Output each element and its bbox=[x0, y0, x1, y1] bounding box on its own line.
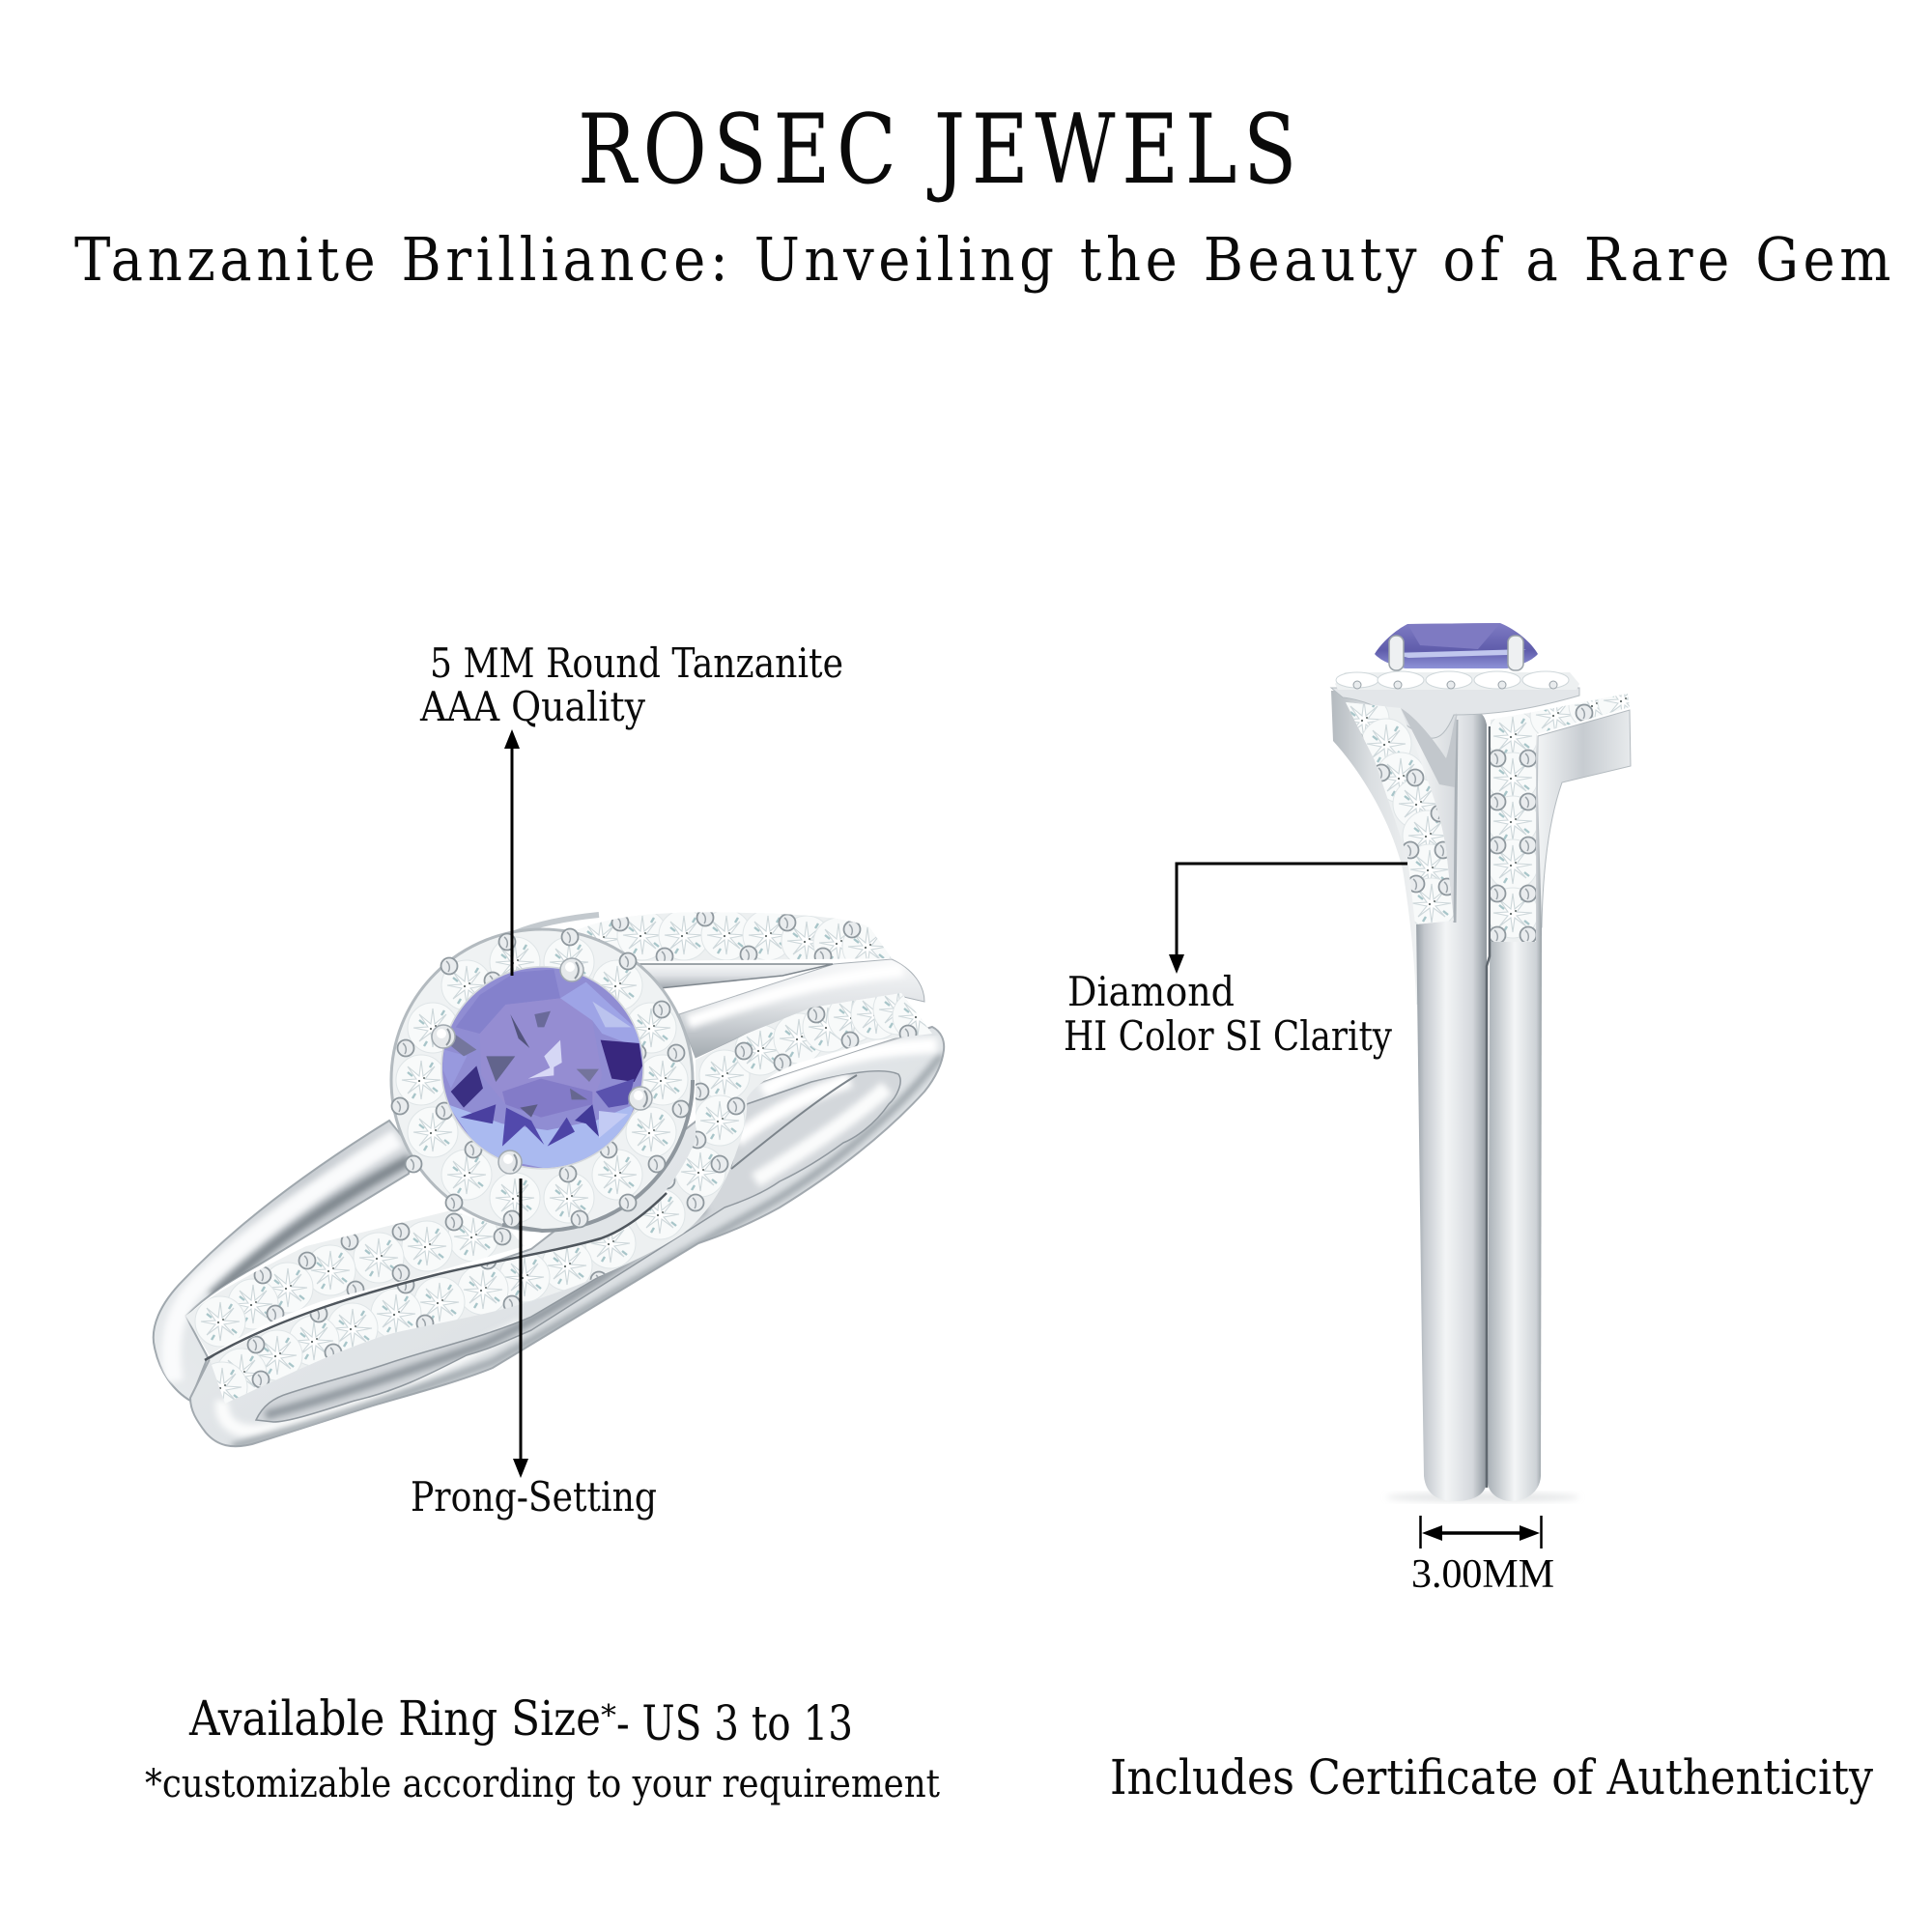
ring size note: - US 3 to 13 bbox=[616, 1695, 853, 1751]
arrow: to diamond label bbox=[1169, 864, 1407, 974]
ring size note: * bbox=[601, 1699, 616, 1733]
center stone: tanzanite bbox=[438, 963, 647, 1172]
customization note: *customizable according to your requirement bbox=[145, 1762, 940, 1806]
shadow bbox=[1386, 1492, 1579, 1502]
pave band: upper ring left bbox=[184, 1203, 531, 1357]
right band column bbox=[1488, 724, 1542, 1501]
title: ROSEC JEWELS bbox=[578, 95, 1303, 206]
inner metal under top band bbox=[638, 964, 833, 988]
lower ring inner surface bbox=[256, 1071, 900, 1422]
right flare bbox=[1536, 710, 1631, 927]
arrow: to prong setting label bbox=[513, 1179, 528, 1478]
top metal arc into band bbox=[515, 915, 599, 933]
center ridge bbox=[1454, 710, 1487, 927]
callout text: diamond: Diamond bbox=[1067, 968, 1235, 1015]
callout text: diamond bbox=[1064, 968, 1392, 1060]
left band column bbox=[1416, 918, 1487, 1501]
side pave left bbox=[1346, 702, 1454, 924]
lower ring body bbox=[190, 1027, 944, 1447]
head plate bbox=[1331, 688, 1579, 738]
stone prongs bbox=[432, 958, 652, 1174]
callout text: stone: 5 MM Round Tanzanite bbox=[430, 639, 843, 687]
side prongs bbox=[1389, 636, 1523, 670]
halo diamond row bbox=[1335, 671, 1579, 690]
callout text: prong setting: Prong-Setting bbox=[411, 1473, 657, 1520]
ring size note bbox=[188, 1690, 853, 1751]
side stone bbox=[1375, 623, 1538, 668]
pave band: lower ring bbox=[193, 984, 947, 1420]
upper ring left shank bbox=[154, 1121, 412, 1401]
halo setting bbox=[391, 929, 693, 1231]
callout text: diamond: HI Color SI Clarity bbox=[1064, 1012, 1392, 1060]
callout text: stone: AAA Quality bbox=[419, 683, 645, 730]
ring set: three-quarter view bbox=[154, 908, 947, 1447]
ring size note: Available Ring Size bbox=[188, 1690, 601, 1747]
pave band: top right bbox=[577, 912, 892, 961]
left shank flare bbox=[1331, 691, 1459, 1005]
dimension label: 3.00MM bbox=[1411, 1552, 1554, 1597]
side pave right bbox=[1491, 694, 1630, 942]
callout text: stone bbox=[419, 639, 843, 730]
ring set: side view bbox=[1331, 623, 1648, 1502]
upper ring right shank bbox=[679, 959, 924, 1058]
arrow: to stone label bbox=[504, 729, 520, 976]
dimension arrow: band width bbox=[1420, 1516, 1542, 1548]
